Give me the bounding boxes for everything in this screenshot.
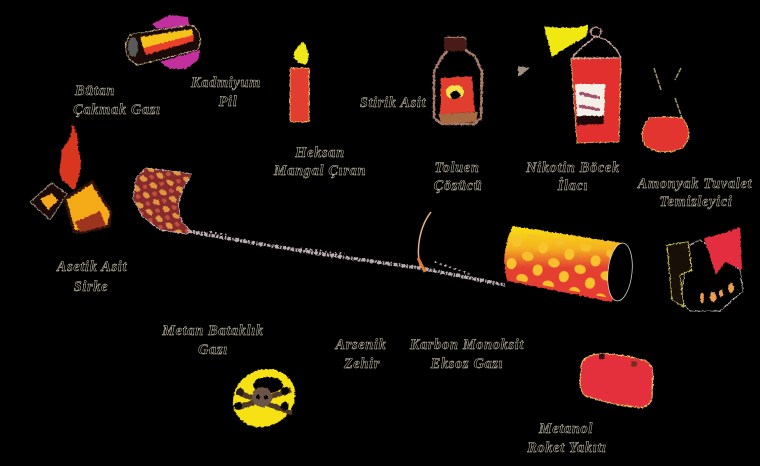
cigarette burning ember	[133, 168, 192, 234]
label: methanol: Roket Yakıtı	[526, 440, 607, 456]
icon: candle	[290, 42, 309, 122]
label: hexane: Mangal Çıran	[273, 163, 366, 179]
cigarette paper outline	[188, 231, 505, 285]
label: cadmium: Pil	[219, 94, 237, 110]
label: cadmium	[190, 75, 261, 110]
label: acetic acid: Sirke	[74, 279, 108, 295]
cigarette paper seam	[418, 212, 431, 268]
filter spots	[507, 232, 612, 298]
can body	[571, 58, 621, 143]
label: nicotine: Nikotin Böcek	[525, 160, 620, 176]
label: toluene: Çözücü	[434, 178, 482, 194]
icon: skull and crossbones	[222, 358, 306, 438]
label: carbon monoxide: Eksoz Gazı	[430, 356, 503, 372]
label: arsenic: Zehir	[343, 356, 380, 372]
label: hexane	[273, 145, 366, 179]
spray mist	[544, 25, 588, 57]
icon: bottle	[434, 38, 482, 124]
label: toluene	[434, 160, 482, 194]
icon: battery	[126, 15, 200, 69]
label: carbon monoxide	[409, 337, 524, 372]
icon: spray can	[518, 25, 621, 143]
label: ammonia	[637, 176, 753, 210]
label: butane: Bütan	[74, 83, 115, 99]
label: carbon monoxide: Karbon Monoksit	[409, 337, 524, 353]
label: methanol	[526, 421, 607, 456]
label: methane: Metan Bataklık	[161, 323, 264, 339]
label: methane: Gazı	[198, 342, 228, 358]
label: toluene: Toluen	[434, 160, 480, 176]
label: acetic acid	[56, 259, 127, 295]
label: cadmium: Kadmiyum	[190, 75, 261, 91]
cigarette	[133, 168, 635, 302]
label: ammonia: Temizleyici	[659, 194, 733, 210]
label: acetic acid: Asetik Asit	[56, 259, 127, 275]
filter mouth end	[605, 242, 635, 302]
label: butane	[73, 83, 161, 118]
icon: paint can	[667, 227, 743, 311]
icon: fuel canister	[580, 354, 653, 408]
label: hexane: Heksan	[294, 145, 345, 161]
label: methanol: Metanol	[538, 421, 593, 437]
label: stearic acid: Stirik Asit	[360, 95, 427, 111]
label: arsenic: Arsenik	[335, 337, 387, 353]
icon: lighter	[30, 124, 111, 232]
label: nicotine	[525, 160, 620, 194]
label: methane	[161, 323, 264, 358]
label: ammonia: Amonyak Tuvalet	[637, 176, 753, 192]
label: nicotine: İlacı	[557, 177, 588, 194]
label: butane: Çakmak Gazı	[73, 102, 161, 118]
battery wrapper shape	[152, 15, 200, 69]
cigarette filter	[504, 226, 622, 302]
label: arsenic	[335, 337, 387, 372]
icon: flask	[642, 68, 689, 152]
